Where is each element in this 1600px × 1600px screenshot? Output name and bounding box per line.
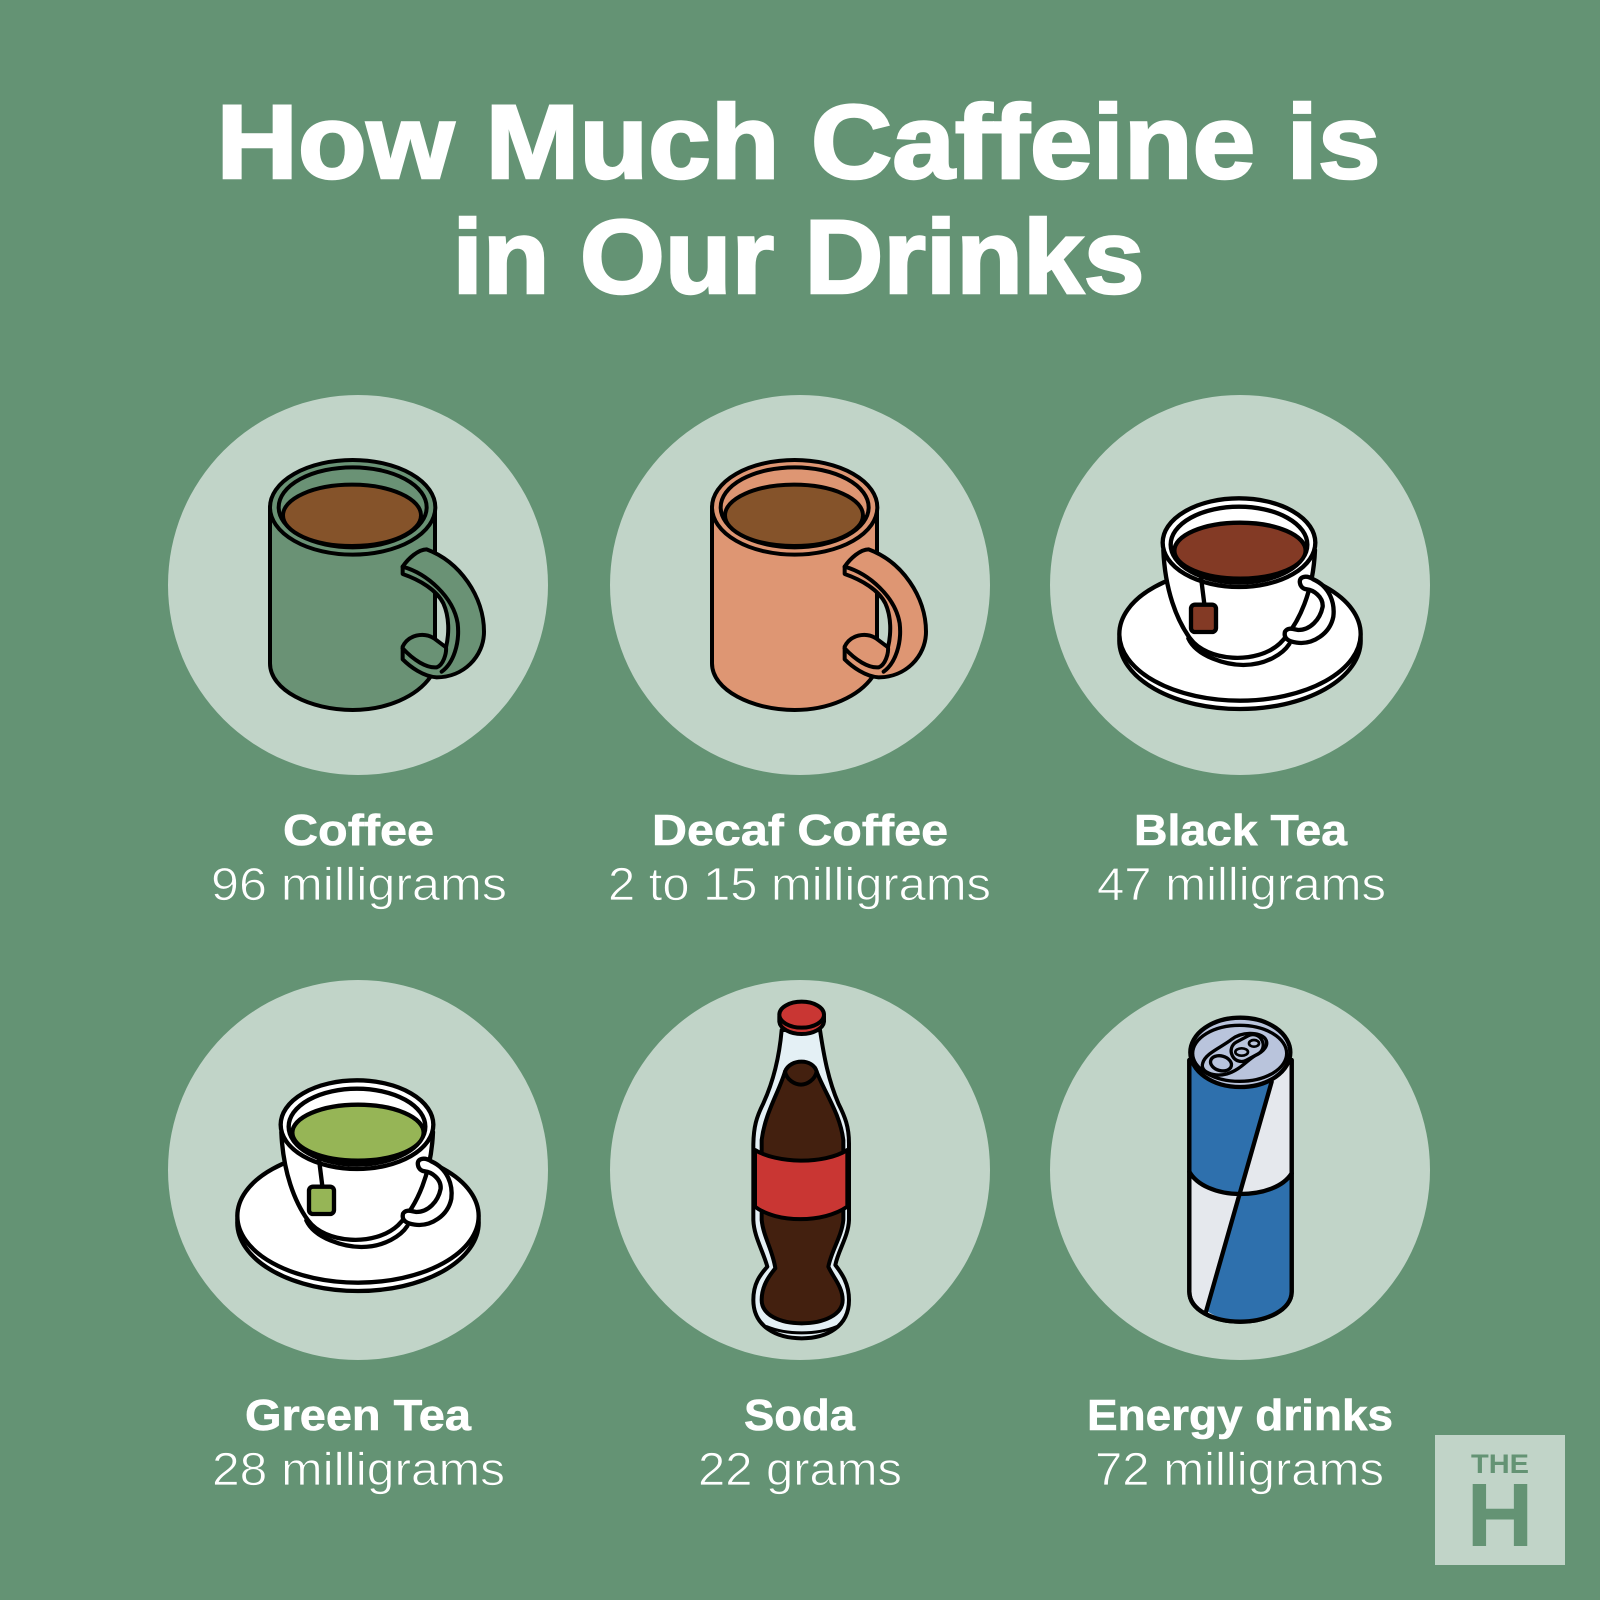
logo: The H: THE xyxy=(1471,1449,1529,1479)
label: decaf coffee: Decaf Coffee xyxy=(652,806,948,855)
label: black tea: 47 milligrams xyxy=(1097,858,1386,910)
label: energy drinks: Energy drinks xyxy=(1087,1391,1393,1440)
icon: energy drink can xyxy=(1189,1018,1292,1322)
label: soda: 22 grams xyxy=(698,1443,902,1495)
label: energy drinks: 72 milligrams xyxy=(1095,1443,1384,1495)
icon: orange coffee mug xyxy=(712,460,926,710)
logo: The H: H xyxy=(1466,1466,1534,1566)
label: soda: Soda xyxy=(744,1391,856,1440)
label: coffee: Coffee xyxy=(283,806,434,855)
label: green tea xyxy=(212,1391,505,1495)
label: coffee: 96 milligrams xyxy=(211,858,507,910)
label: decaf coffee xyxy=(608,806,991,910)
logo: The H xyxy=(1435,1435,1565,1566)
panel: decaf coffee xyxy=(610,395,990,775)
title: in Our Drinks xyxy=(452,199,1144,316)
panel: energy drinks xyxy=(1050,980,1430,1360)
panel: coffee xyxy=(168,395,548,775)
label: coffee xyxy=(211,806,507,910)
label: decaf coffee: 2 to 15 milligrams xyxy=(608,858,991,910)
icon: black tea cup xyxy=(1119,498,1361,709)
label: green tea: 28 milligrams xyxy=(212,1443,505,1495)
icon: green coffee mug xyxy=(270,460,484,710)
icon: green tea cup xyxy=(237,1080,479,1291)
label: green tea: Green Tea xyxy=(245,1391,472,1440)
label: black tea xyxy=(1097,806,1386,910)
icon: soda bottle xyxy=(753,1002,849,1338)
label: soda xyxy=(698,1391,902,1495)
title: How Much Caffeine is xyxy=(216,84,1380,201)
title xyxy=(216,84,1380,316)
label: black tea: Black Tea xyxy=(1134,806,1348,855)
panel: black tea xyxy=(1050,395,1430,775)
label: energy drinks xyxy=(1087,1391,1393,1495)
panel: green tea xyxy=(168,980,548,1360)
panel: soda xyxy=(610,980,990,1360)
